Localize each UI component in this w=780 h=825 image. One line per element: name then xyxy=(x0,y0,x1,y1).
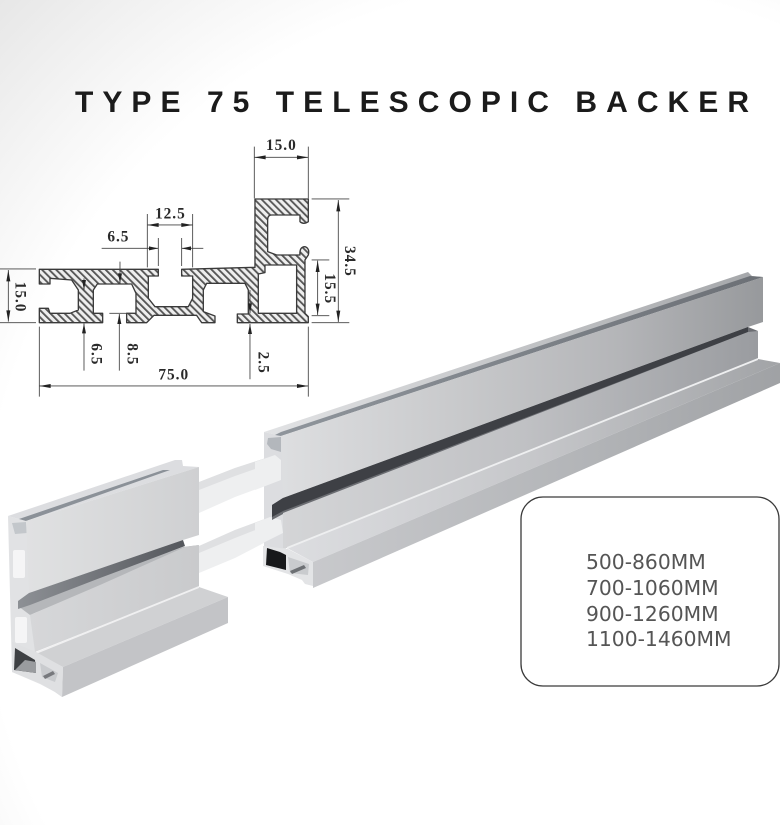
short extrusion hole floor xyxy=(15,660,36,673)
long extrusion shelf top xyxy=(287,359,780,562)
long extrusion connector lower end xyxy=(255,517,283,547)
dimension labels: 12.5 xyxy=(155,205,186,222)
length list: 900-1260MM xyxy=(586,602,719,626)
long extrusion top rail xyxy=(264,272,763,436)
short extrusion rubber strip xyxy=(18,540,185,609)
short extrusion top rail xyxy=(8,460,199,521)
short extrusion square hole xyxy=(14,648,36,673)
short extrusion upper plate xyxy=(26,467,199,593)
title: TYPE 75 TELESCOPIC BACKER xyxy=(75,86,749,119)
short extrusion clip window xyxy=(13,550,25,578)
long extrusion end body xyxy=(264,432,286,566)
long extrusion upper channel xyxy=(267,437,281,452)
cross-section drawing with dimensions xyxy=(0,137,358,397)
short extrusion shelf front xyxy=(62,597,228,697)
short extrusion shelf highlight xyxy=(36,586,199,654)
dimension arrows xyxy=(6,155,340,388)
telescopic connector bars xyxy=(199,455,283,573)
rounded panel border xyxy=(521,497,779,686)
long extrusion end frame xyxy=(263,546,313,586)
long extrusion shelf highlight xyxy=(287,358,758,549)
length list: 700-1060MM xyxy=(586,576,719,600)
dimension labels: 15.0 xyxy=(266,137,297,154)
short extrusion lower plate xyxy=(30,545,199,652)
length list: 1100-1460MM xyxy=(586,627,732,651)
short extrusion end body xyxy=(8,516,63,697)
dimension labels: 2.5 xyxy=(254,352,271,374)
dimension labels: 75.0 xyxy=(158,366,189,383)
dimension lines xyxy=(0,147,349,397)
short extrusion groove wall xyxy=(18,545,199,615)
dimension labels: 6.5 xyxy=(88,343,105,365)
long extrusion square hole xyxy=(266,548,286,570)
short extrusion channel xyxy=(19,470,170,521)
length list: 500-860MM xyxy=(586,550,706,574)
short extrusion end frame xyxy=(12,642,63,697)
length list xyxy=(586,550,732,651)
long extrusion connector end xyxy=(255,455,281,490)
dimension labels: 15.0 xyxy=(12,282,29,312)
dimension labels: 15.5 xyxy=(321,273,338,304)
dimension labels xyxy=(12,137,358,383)
short extrusion lower slot xyxy=(40,663,58,682)
long extrusion rubber strip xyxy=(272,327,748,517)
long extrusion lower slot xyxy=(288,557,309,575)
long extrusion xyxy=(255,272,780,588)
long extrusion channel xyxy=(275,276,763,436)
long extrusion shelf front xyxy=(313,363,780,588)
long extrusion slot shadow xyxy=(290,565,306,574)
short extrusion lower clip window xyxy=(15,617,27,643)
short extrusion shelf top xyxy=(36,587,228,667)
length options panel xyxy=(521,497,779,686)
long extrusion lower plate xyxy=(283,331,758,548)
long extrusion groove wall xyxy=(272,327,758,520)
long extrusion upper plate xyxy=(281,277,763,498)
dimension labels: 34.5 xyxy=(341,246,358,277)
short extrusion slot shadow xyxy=(43,671,55,679)
dimension labels: 6.5 xyxy=(107,229,129,246)
profile cross-section xyxy=(39,199,309,323)
short extrusion upper channel xyxy=(12,522,27,534)
dimension labels: 8.5 xyxy=(123,343,140,365)
short extrusion xyxy=(8,460,228,697)
